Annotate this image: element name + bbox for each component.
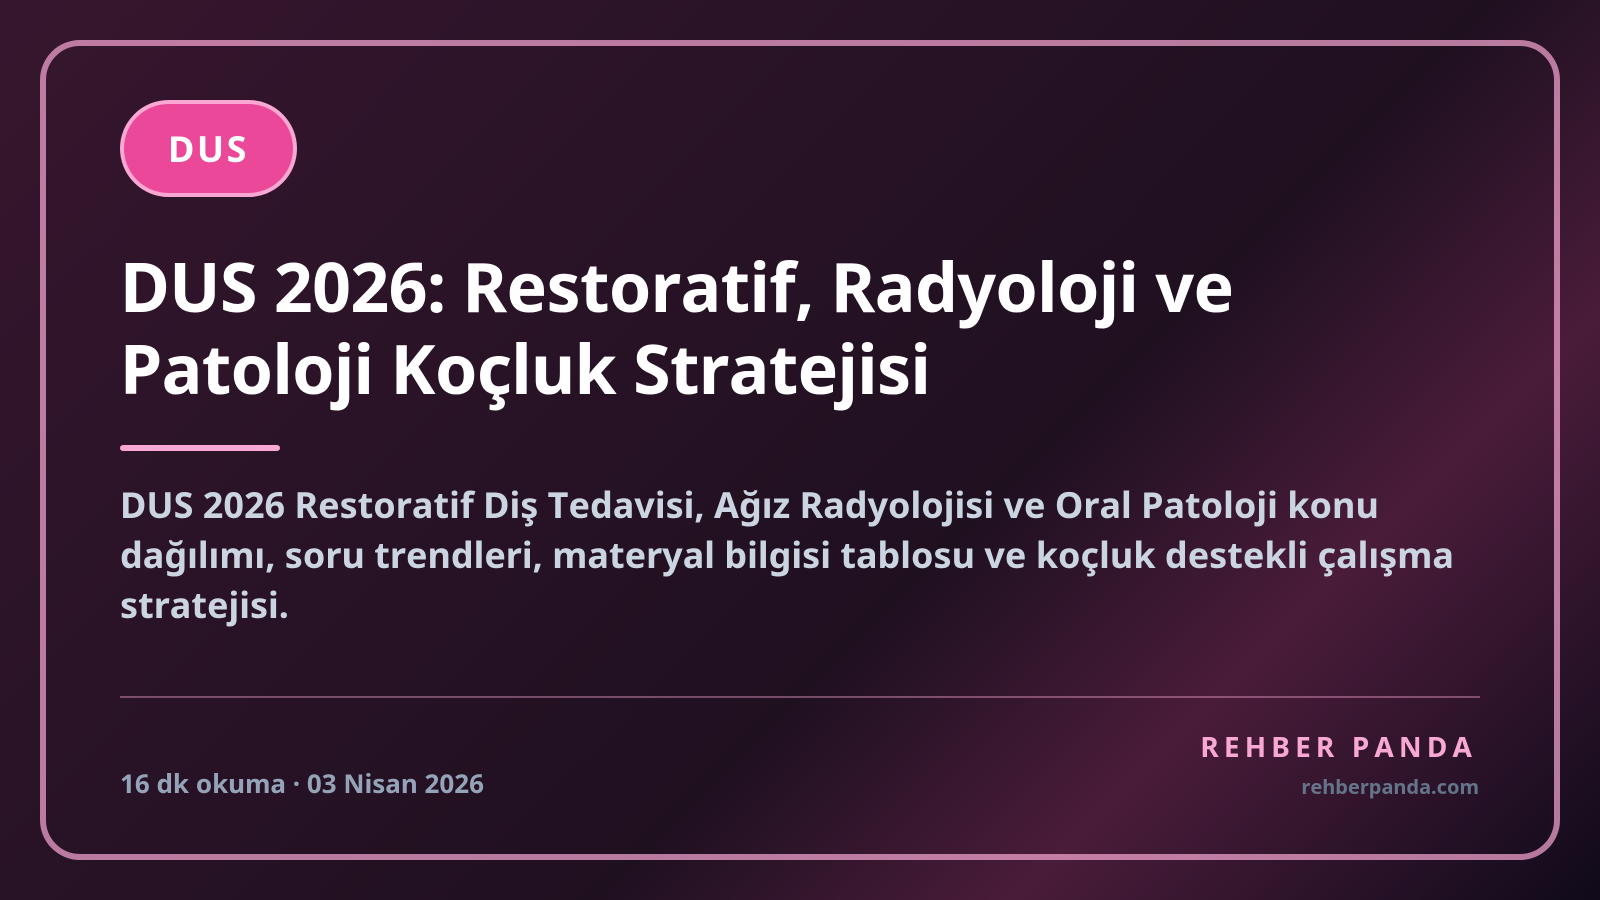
subtitle text: dağılımı, soru trendleri, materyal bilgisi tablosu ve koçluk destekli çalışma — [120, 530, 1454, 579]
title — [120, 239, 1233, 414]
accent rule — [120, 445, 280, 451]
brand name: REHBER PANDA — [1200, 728, 1477, 766]
badge: DUS: DUS — [168, 124, 249, 173]
title: DUS 2026: Restoratif, Radyoloji ve — [120, 239, 1233, 332]
meta: reading time and date: 16 dk okuma · 03 Nisan 2026 — [120, 765, 484, 801]
divider — [120, 696, 1480, 698]
brand url: rehberpanda.com — [1301, 773, 1479, 800]
subtitle text: stratejisi. — [120, 580, 289, 629]
subtitle text: DUS 2026 Restoratif Diş Tedavisi, Ağız Radyolojisi ve Oral Patoloji konu — [120, 480, 1379, 529]
title: Patoloji Koçluk Stratejisi — [120, 321, 930, 414]
badge: DUS — [120, 100, 297, 197]
subtitle text — [120, 480, 1454, 629]
